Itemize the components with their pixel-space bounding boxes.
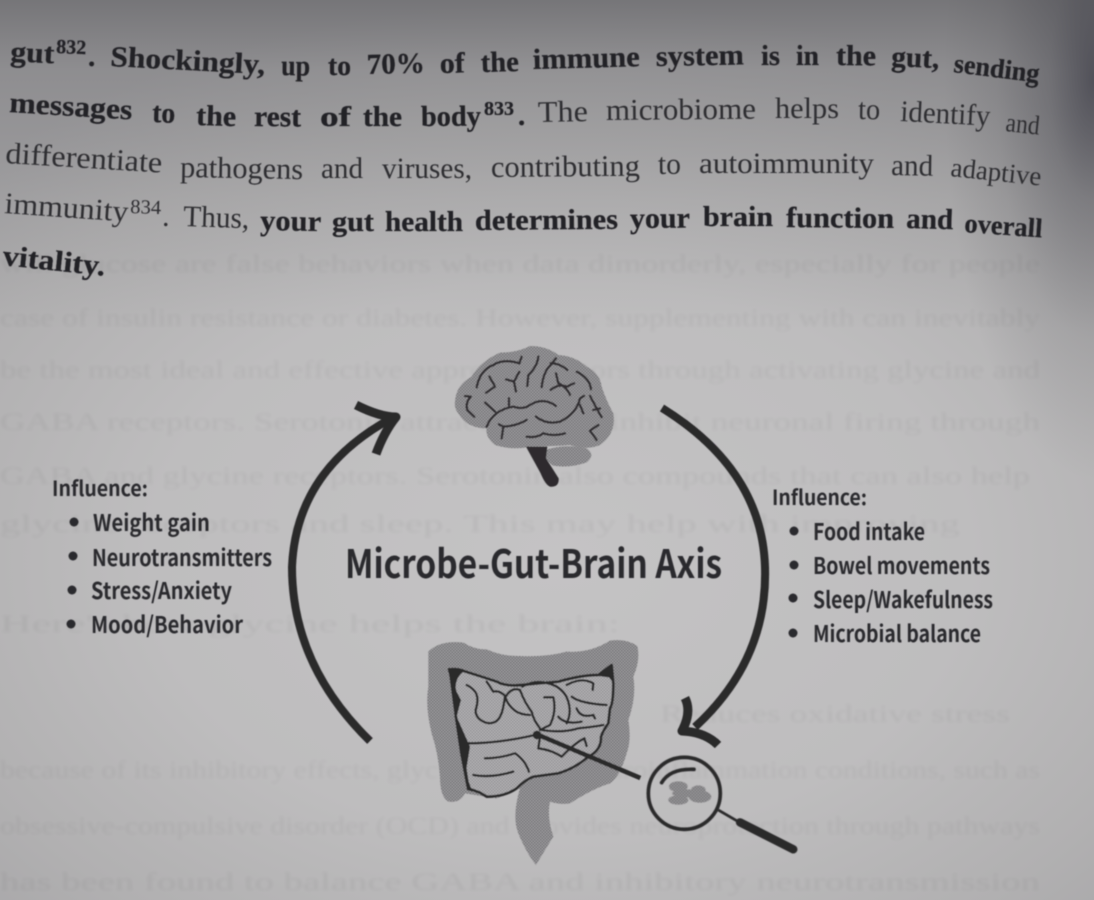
line 3: autoimmunity <box>699 147 874 180</box>
icon: brain <box>455 346 614 487</box>
dark shadow edges <box>448 664 614 792</box>
line 1 <box>10 36 1042 88</box>
line 2: to <box>152 97 176 130</box>
faint bleed-through text from the next page: because of its inhibitory effects, glycine reduces neuroinflammation conditions, such as <box>0 757 1040 784</box>
line 2: the <box>196 100 237 133</box>
line 3: to <box>658 148 681 181</box>
line 2: identify <box>900 95 991 133</box>
right influence list <box>772 482 993 649</box>
line 1: 70% <box>366 47 425 81</box>
faint bleed-through text from the next page: GABA and glycine receptors. Serotonin also compounds that can also help <box>0 463 1030 490</box>
line 2: rest <box>254 101 302 133</box>
line 2 <box>9 87 1042 141</box>
line 4: your <box>630 202 690 235</box>
arrow: gut to brain (left) <box>292 405 396 741</box>
line 1: system <box>656 39 744 73</box>
line 2: microbiome <box>606 93 756 127</box>
line 3: differentiate <box>5 137 163 180</box>
line 4: immunity <box>4 187 130 229</box>
right influence list: Influence: <box>772 482 867 512</box>
faint bleed-through text from the next page <box>0 251 1041 896</box>
line 2: helps <box>775 92 839 125</box>
cerebellum <box>543 446 591 466</box>
item: food intake: Food intake <box>813 513 925 547</box>
item: bowel movements: Bowel movements <box>813 547 990 581</box>
magnifier <box>648 757 793 849</box>
arrow: brain to gut (right) <box>662 408 765 745</box>
line 2: body <box>421 100 482 133</box>
small intestine <box>448 664 640 797</box>
paragraph text <box>1 36 1044 283</box>
line 3: contributing <box>491 150 640 184</box>
line 4: gut <box>332 206 374 238</box>
line 2: . <box>518 100 525 132</box>
faint bleed-through text from the next page: glycine receptors and sleep. This may help with improving <box>0 511 961 538</box>
line 1: Shockingly, <box>110 41 266 81</box>
line 1: to <box>328 50 351 82</box>
line 3: adaptive <box>949 152 1043 191</box>
line 1: 832 <box>56 36 87 59</box>
left influence list <box>52 473 272 640</box>
line 3: and <box>321 152 363 185</box>
line 4: overall <box>964 208 1044 243</box>
line 1: the <box>480 46 519 79</box>
line 1: sending <box>952 48 1042 88</box>
line 4: function <box>786 202 894 235</box>
brain halftone shape <box>455 346 614 448</box>
line 4: Thus, <box>183 200 250 235</box>
left influence list: Influence: <box>52 473 148 503</box>
item: microbial balance: Microbial balance <box>813 615 981 649</box>
line 1: gut, <box>891 41 940 75</box>
faint bleed-through text from the next page: case of insulin resistance or diabetes. However, supplementing with can inevitably <box>0 305 1041 332</box>
line 2: the <box>363 101 402 133</box>
line 1: up <box>281 50 310 83</box>
line 1: in <box>796 40 819 72</box>
line 2: and <box>1004 107 1042 141</box>
line 1: gut <box>10 36 56 70</box>
line 1: is <box>761 40 780 72</box>
line 1: . <box>88 41 95 73</box>
line 2: of <box>320 101 351 133</box>
pointer line <box>533 731 640 778</box>
line 3: pathogens <box>180 151 303 186</box>
diagram <box>52 346 993 865</box>
line 4: your <box>260 205 322 238</box>
line 2: The <box>538 95 588 129</box>
faint bleed-through text from the next page: will glucose are false behaviors when data dimorderly, especially for people <box>0 251 1040 278</box>
item: neurotransmitters: Neurotransmitters <box>92 539 272 573</box>
line 1: the <box>836 40 876 72</box>
faint bleed-through text from the next page: Here's how glycine helps the brain: <box>0 611 620 638</box>
faint bleed-through text from the next page: has been found to balance GABA and inhibitory neurotransmission <box>0 869 1041 896</box>
line 3 <box>5 137 1043 191</box>
icon: intestines with magnifier <box>427 640 793 865</box>
line 2: messages <box>9 87 133 126</box>
title: Microbe-Gut-Brain Axis <box>345 534 722 590</box>
item: sleep/wakefulness: Sleep/Wakefulness <box>813 581 993 615</box>
item: mood/behavior: Mood/Behavior <box>91 606 244 640</box>
line 4 <box>4 187 1044 243</box>
line 2: to <box>858 93 880 126</box>
line 3: viruses, <box>382 152 472 185</box>
line 4: health <box>385 206 463 238</box>
line 3: and <box>891 149 933 183</box>
faint bleed-through text from the next page: obsessive-compulsive disorder (OCD) and Provides neuroprotection through pathways <box>0 813 1040 840</box>
intestine folds <box>467 680 607 776</box>
line 1: immune <box>532 41 640 76</box>
intestine outline <box>449 665 613 797</box>
line 1: of <box>439 47 466 80</box>
line 2: 833 <box>484 98 514 120</box>
faint bleed-through text from the next page: GABA receptors. Serotonin attract glycine inhibit neuronal firing through <box>0 409 1041 436</box>
line 4: 834 <box>130 196 162 219</box>
line 4: . <box>162 200 170 233</box>
line 4: brain <box>703 201 773 233</box>
faint bleed-through text from the next page: Reduces oxidative stress <box>660 701 1010 728</box>
line 4: determines <box>475 204 618 237</box>
brain stem <box>526 447 559 487</box>
item: weight gain: Weight gain <box>93 504 210 538</box>
brain folds <box>465 357 602 440</box>
large intestine <box>427 640 638 865</box>
item: stress/anxiety: Stress/Anxiety <box>91 572 232 606</box>
line 5: vitality. <box>1 240 107 283</box>
line 4: and <box>906 203 954 236</box>
faint bleed-through text from the next page: be the most ideal and effective approach factors through activating glycine and <box>0 357 1041 384</box>
